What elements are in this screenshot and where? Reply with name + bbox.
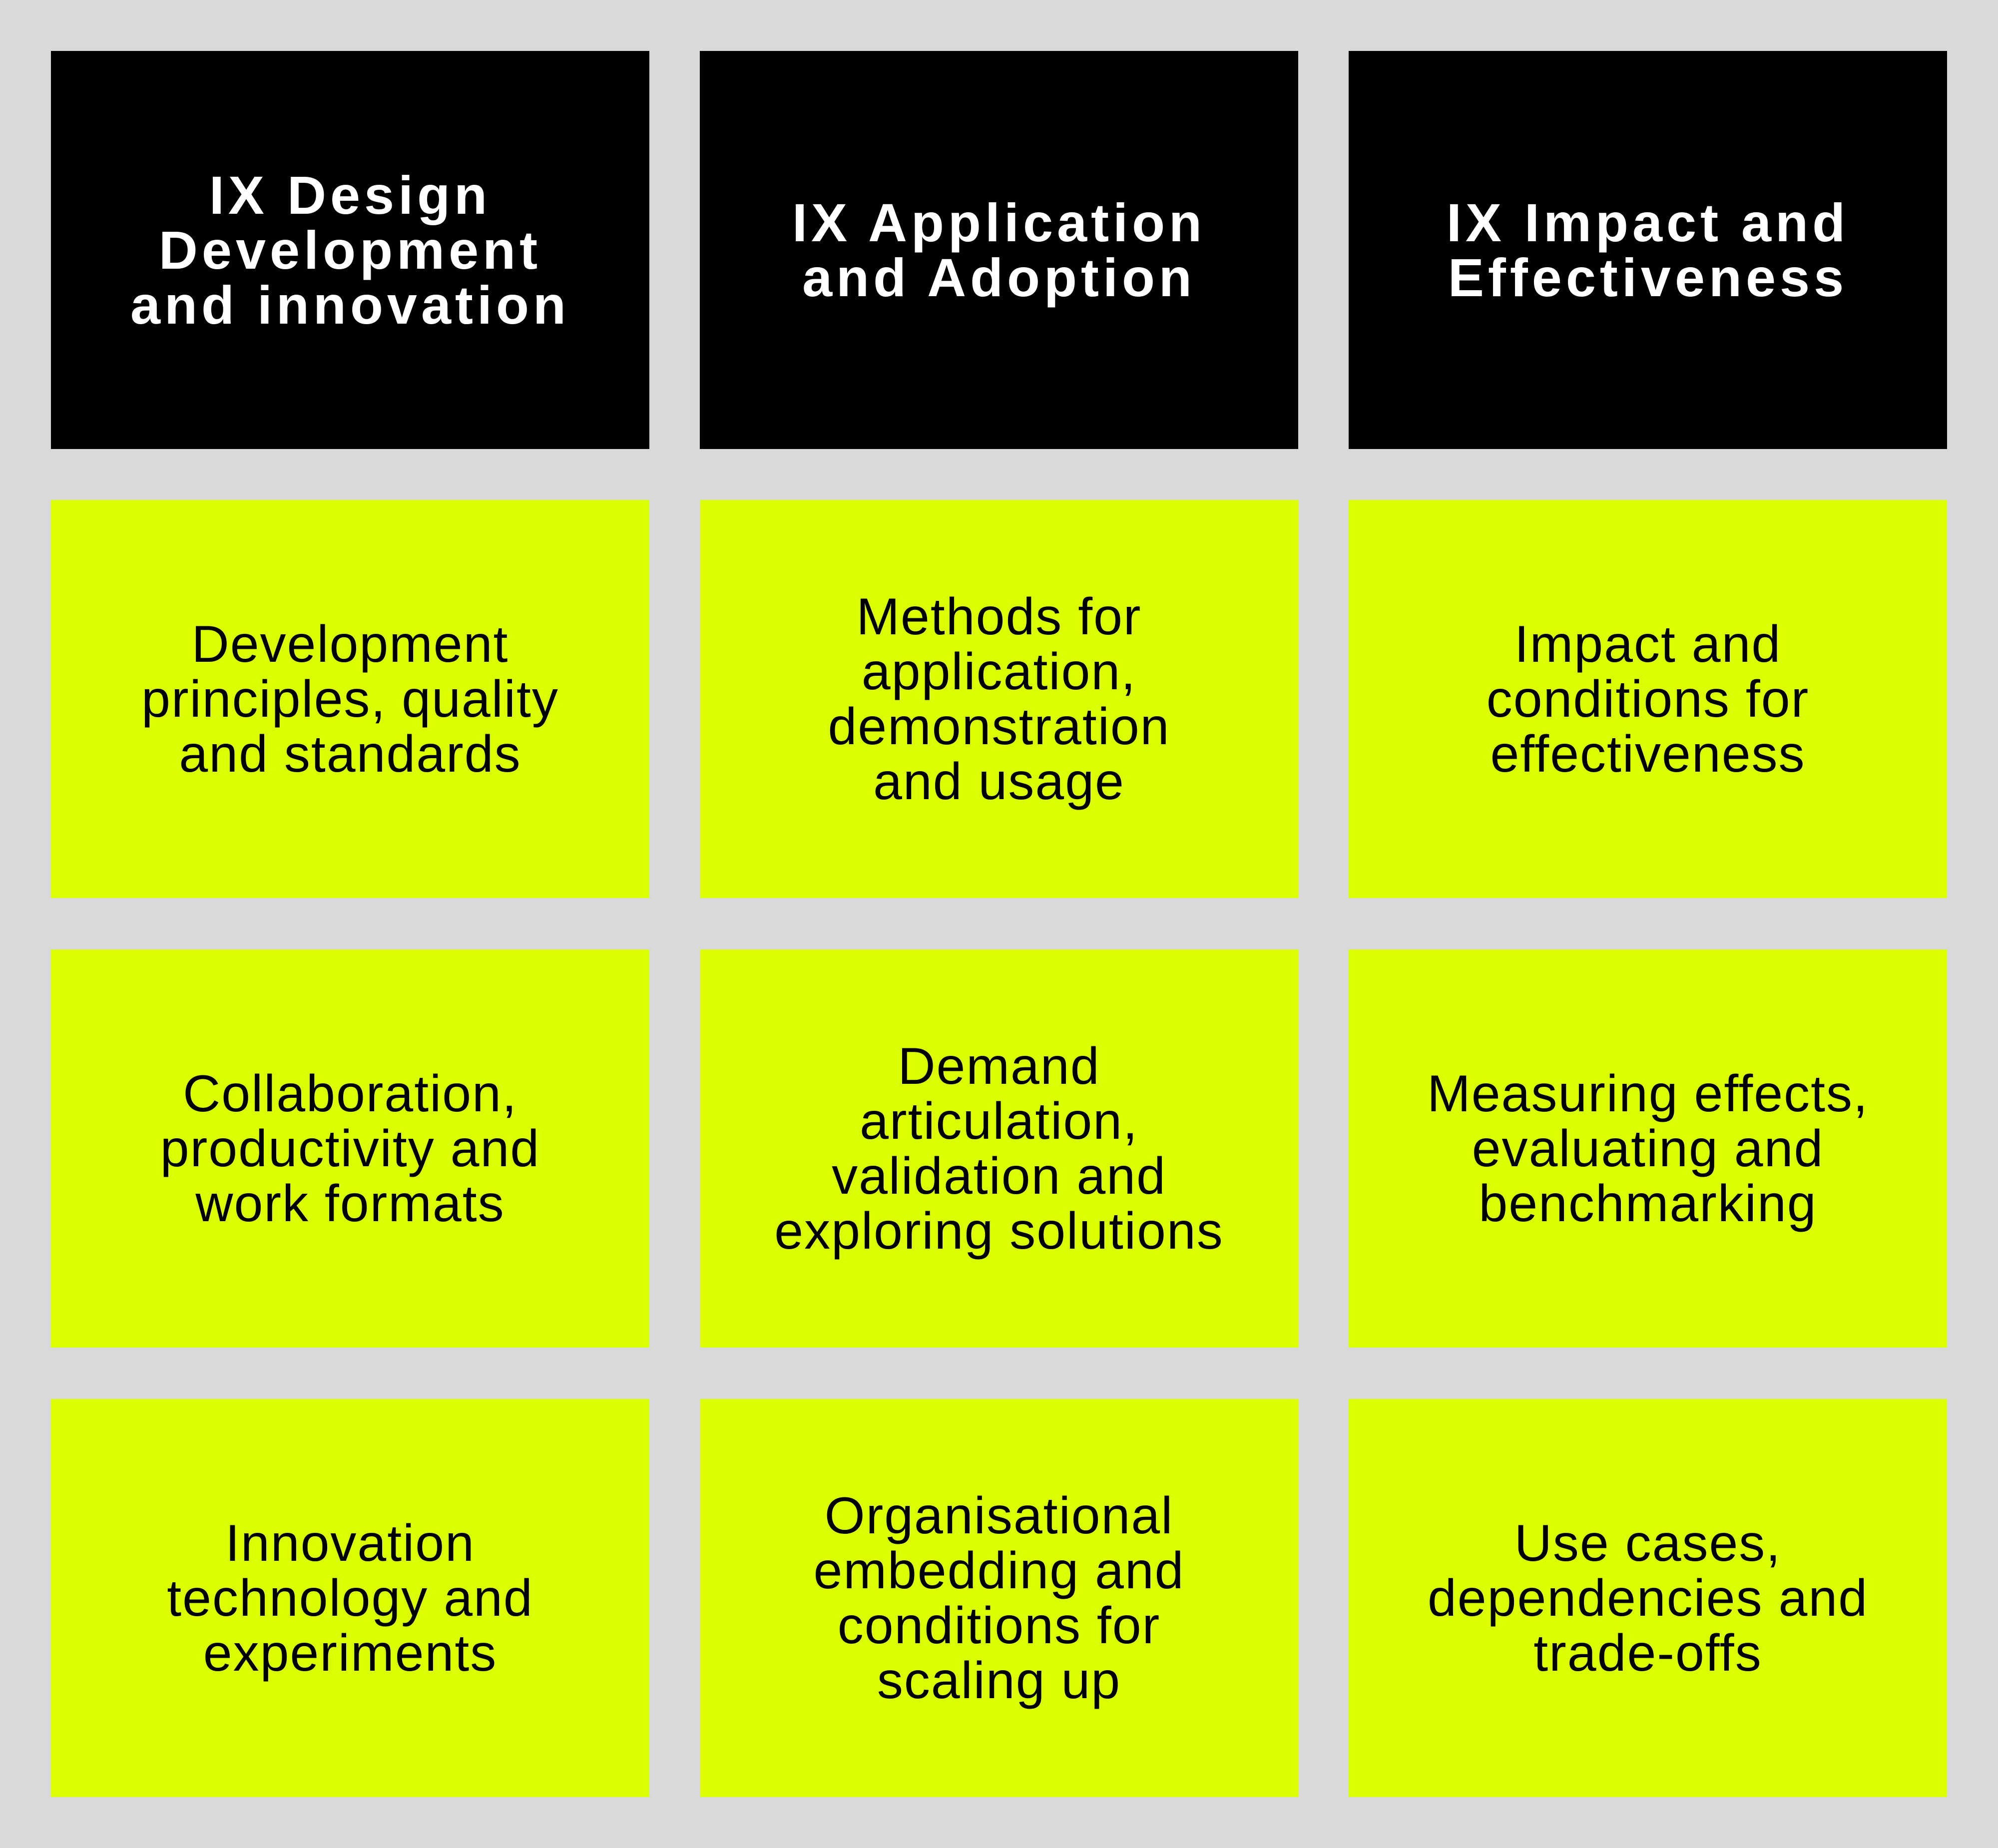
panel: development principles [51, 500, 649, 898]
panel: use cases: trade-offs [1533, 1624, 1762, 1682]
panel: impact and conditions: conditions for [1487, 670, 1809, 728]
header: IX Impact and Effectiveness [1349, 51, 1947, 449]
panel: demand articulation: exploring solutions [774, 1202, 1224, 1260]
panel: use cases: dependencies and [1428, 1569, 1868, 1627]
panel: organisational embedding [700, 1399, 1298, 1797]
panel: impact and conditions [1349, 500, 1947, 898]
panel: organisational embedding: embedding and [813, 1541, 1185, 1599]
panel: methods for application: Methods for [856, 587, 1142, 645]
header: IX Design Development and innovation [51, 51, 649, 449]
panel: demand articulation [700, 949, 1298, 1348]
header: IX Application and Adoption: IX Application [792, 192, 1206, 253]
panel: collaboration: work formats [195, 1175, 505, 1233]
panel: innovation technology: experiments [203, 1624, 497, 1682]
panel: measuring effects [1349, 949, 1947, 1348]
panel: innovation technology [51, 1399, 649, 1797]
header: IX Impact and Effectiveness: Effectiveness [1448, 247, 1848, 308]
header: IX Design Development and innovation: IX Design [209, 165, 491, 225]
panel: collaboration [51, 949, 649, 1348]
panel: impact and conditions: effectiveness [1490, 725, 1806, 783]
panel: demand articulation: articulation, [860, 1092, 1138, 1150]
panel: methods for application: application, [862, 642, 1136, 700]
header: IX Impact and Effectiveness: IX Impact and [1447, 192, 1849, 253]
header: IX Application and Adoption [700, 51, 1298, 449]
panel: measuring effects: Measuring effects, [1427, 1065, 1869, 1123]
panel: collaboration: Collaboration, [183, 1065, 517, 1123]
panel: development principles: and standards [179, 725, 521, 783]
panel: innovation technology: technology and [167, 1569, 533, 1627]
panel: development principles: principles, quality [141, 670, 559, 728]
panel: methods for application [700, 500, 1298, 898]
panel: use cases [1349, 1399, 1947, 1797]
panel: demand articulation: Demand [898, 1037, 1100, 1095]
header: IX Design Development and innovation: Development [159, 220, 541, 280]
panel: measuring effects: benchmarking [1479, 1175, 1817, 1233]
panel: use cases: Use cases, [1514, 1514, 1781, 1572]
panel: organisational embedding: scaling up [877, 1651, 1121, 1709]
panel: impact and conditions: Impact and [1514, 615, 1781, 673]
panel: demand articulation: validation and [832, 1147, 1166, 1205]
panel: methods for application: demonstration [828, 697, 1170, 755]
header: IX Application and Adoption: and Adoption [802, 247, 1196, 308]
panel: organisational embedding: Organisational [825, 1486, 1173, 1544]
panel: innovation technology: Innovation [225, 1514, 475, 1572]
panel: organisational embedding: conditions for [838, 1596, 1160, 1654]
panel: development principles: Development [192, 615, 508, 673]
panel: collaboration: productivity and [160, 1120, 540, 1178]
header: IX Design Development and innovation: and innovation [130, 275, 570, 335]
panel: measuring effects: evaluating and [1472, 1120, 1824, 1178]
panel: methods for application: and usage [873, 752, 1125, 810]
